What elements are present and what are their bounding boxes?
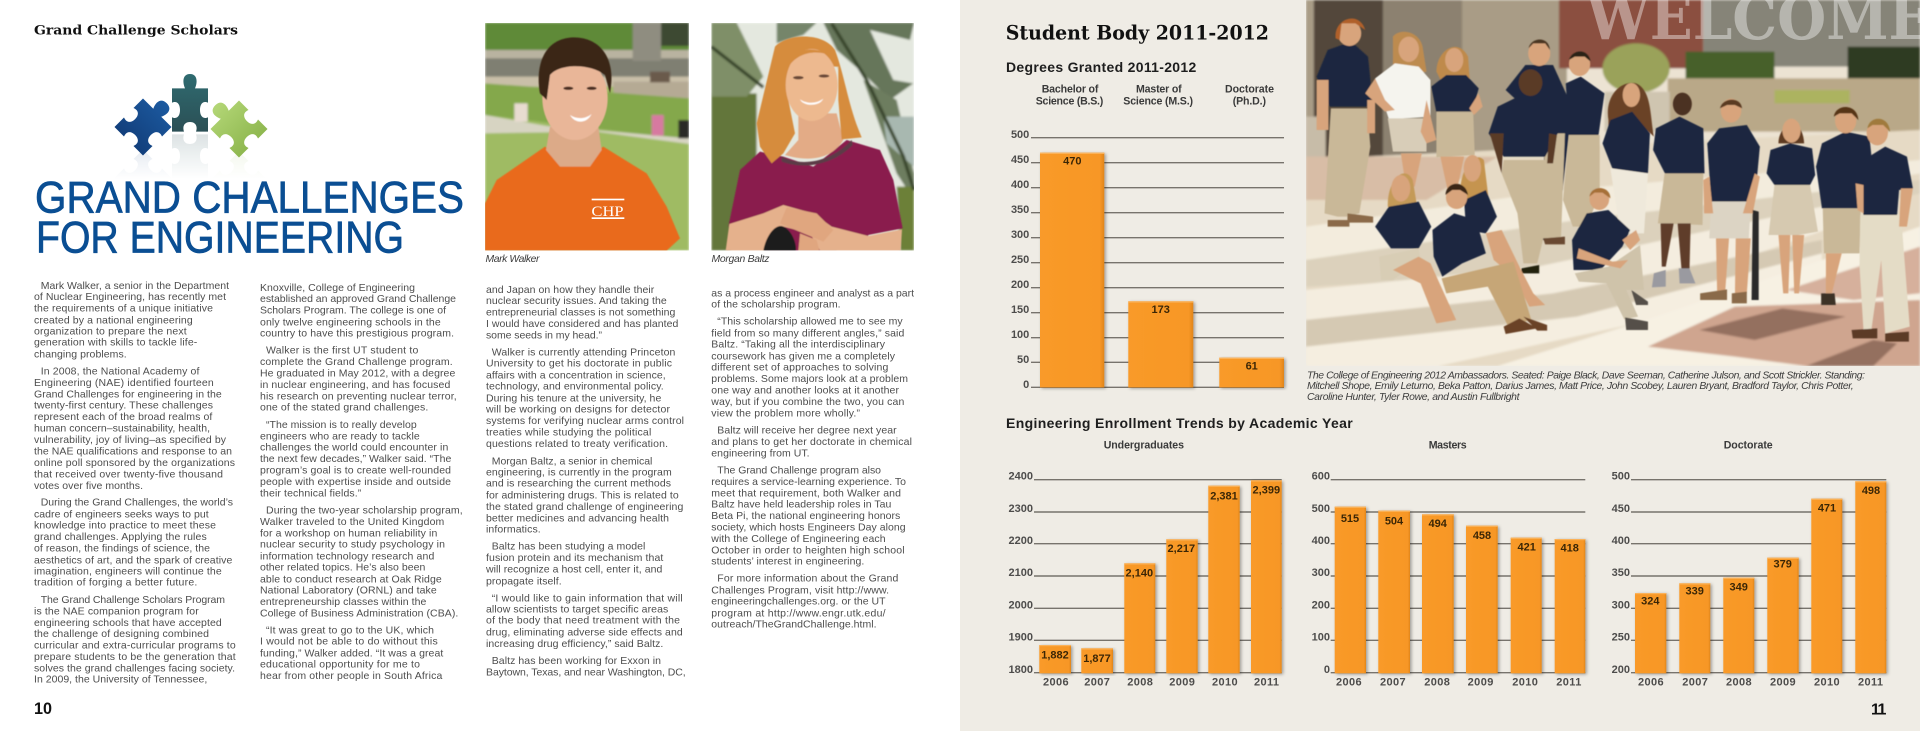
- body text column 1: twenty-first century. These challenges: [34, 399, 213, 411]
- body text column 1: is the NAE companion program for: [34, 605, 199, 617]
- body text column 1: the NAE qualifications and response to an: [34, 445, 232, 457]
- body text column 4: as a process engineer and analyst as a part: [711, 288, 914, 300]
- column labels: Science (B.S.): [1036, 96, 1103, 108]
- y axis labels: 300: [1011, 229, 1029, 241]
- body text column 4: The Grand Challenge program also: [717, 464, 881, 476]
- body text column 4: coursework has given me a completely: [711, 350, 896, 362]
- year labels: [1336, 676, 1582, 688]
- body text column 1: organization to prepare the next: [34, 326, 187, 338]
- caption: Mark Walker: Mark Walker: [486, 254, 540, 265]
- y axis labels: 300: [1312, 567, 1330, 579]
- body text column 4: with the College of Engineering each: [710, 533, 886, 545]
- column labels: Master of: [1136, 84, 1182, 96]
- body text column 3: [485, 284, 686, 678]
- body text column 2: “It was great to go to the UK, which: [266, 624, 434, 636]
- photo: College of Engineering Ambassadors on steps: [1306, 0, 1920, 366]
- bar values: 339: [1686, 586, 1704, 598]
- body text column 4: and plans to get her doctorate in chemical: [711, 436, 912, 448]
- body text column 1: Engineering (NAE) identified fourteen: [34, 377, 214, 389]
- body text column 1: votes over five months.: [34, 480, 143, 492]
- bar values: 1,877: [1083, 653, 1111, 665]
- body text column 3: of the body that need treatment with the: [486, 615, 680, 627]
- body text column 4: of the scholarship program.: [711, 299, 841, 311]
- body text column 2: people with expertise inside and outside: [260, 476, 451, 488]
- body text column 3: increasing drug efficiency,” said Baltz.: [486, 638, 663, 650]
- bar values: 173: [1152, 304, 1170, 316]
- photo: Mark Walker: CHP: [592, 204, 624, 220]
- bar values: 458: [1473, 530, 1491, 542]
- body text column 1: tradition of forging a better future.: [34, 577, 197, 589]
- bar values: 349: [1730, 581, 1748, 593]
- body text column 3: and Japan on how they handle their: [486, 284, 655, 296]
- y axis labels: 2100: [1009, 567, 1033, 579]
- chart title: Undergraduates: [1104, 439, 1184, 451]
- photo caption: Ambassadors: Mitchell Shope, Emily Leturno, Beka Patton, Darius James, Matt Price, John Scobey, Lauren Bryant, Bradford Taylor, Chris Potter,: [1307, 381, 1854, 392]
- title: Student Body 2011-2012: Student Body 2011-2012: [1006, 21, 1269, 44]
- body text column 1: imagination, engineers will continue the: [34, 565, 222, 577]
- body text column 4: view the problem more wholly.”: [711, 407, 860, 419]
- title: Grand Challenges for Engineering: FOR ENGINEERING: [36, 213, 404, 262]
- body text column 1: vulnerability, joy of living–as specified by: [34, 434, 227, 446]
- body text column 2: Walker is the first UT student to: [266, 345, 418, 357]
- y axis labels: 300: [1612, 600, 1630, 612]
- body text column 2: only twelve engineering schools in the: [260, 316, 441, 328]
- year labels: [1638, 676, 1883, 688]
- y axis labels: 250: [1011, 254, 1029, 266]
- bar values: 471: [1818, 503, 1836, 515]
- y axis labels: 400: [1612, 535, 1630, 547]
- year labels: 2006: [1638, 676, 1664, 688]
- year labels: 2010: [1814, 676, 1840, 688]
- y axis labels: 50: [1017, 354, 1029, 366]
- body text column 1: solves the grand challenges facing society.: [34, 663, 235, 675]
- chart: Degrees Granted 2011-2012: [1006, 59, 1284, 391]
- body text column 2: in nuclear engineering, and has focused: [260, 379, 450, 391]
- body text column 2: He graduated in May 2012, with a degree: [260, 367, 455, 379]
- body text column 4: different set of approaches to solving: [711, 361, 888, 373]
- body text column 1: of Nuclear Engineering, has recently met: [34, 291, 226, 303]
- body text column 2: for a workshop on human reliability in: [260, 527, 437, 539]
- body text column 3: entrepreneurial classes is not something: [486, 307, 675, 319]
- photo: Morgan Baltz: [711, 23, 914, 251]
- y axis labels: 400: [1312, 535, 1330, 547]
- body text column 3: Baltz has been studying a model: [492, 541, 645, 553]
- bar values: 421: [1518, 542, 1536, 554]
- body text column 1: aesthetics of art, and the spark of creative: [34, 554, 232, 566]
- body text column 3: questions related to treaty verification.: [486, 438, 668, 450]
- body text column 1: curricular and extra-curricular programs to: [34, 639, 236, 651]
- body text column 3: propagate itself.: [486, 575, 562, 587]
- body text column 2: National Laboratory (ORNL) and take: [260, 584, 437, 596]
- y axis labels: 500: [1612, 470, 1630, 482]
- y axis labels: 1900: [1009, 632, 1033, 644]
- body text column 3: “I would like to gain information that will: [492, 592, 683, 604]
- year labels: 2006: [1336, 676, 1362, 688]
- body text column 1: human concern–sustainability, health,: [34, 422, 210, 434]
- bar values: [1041, 484, 1280, 665]
- body text column 2: information technology research and: [260, 550, 434, 562]
- body text column 2: During the two-year scholarship program,: [266, 504, 463, 516]
- body text column 3: I would have considered and has planted: [486, 318, 678, 330]
- bar values: 494: [1429, 518, 1448, 530]
- body text column 1: online poll sponsored by the organizations: [34, 457, 235, 469]
- body text column 3: will be working on designs for detector: [485, 403, 670, 415]
- body text column 2: complete the Grand Challenge program.: [260, 356, 453, 368]
- bar values: [1063, 156, 1258, 372]
- body text column 2: College of Business Administration (CBA).: [260, 607, 458, 619]
- body text column 1: cadre of engineers seeks ways to put: [34, 508, 209, 520]
- year labels: 2008: [1726, 676, 1752, 688]
- bars: [1335, 507, 1585, 673]
- body text column 2: one of the stated grand challenges.: [260, 402, 428, 414]
- caption: Morgan Baltz: Morgan Baltz: [712, 254, 770, 265]
- bar values: 2,381: [1210, 491, 1238, 503]
- body text column 2: Knoxville, College of Engineering: [260, 282, 415, 294]
- photo: Mark Walker: [485, 23, 689, 251]
- body text column 3: University to get his doctorate in public: [486, 358, 672, 370]
- body text column 2: hear from other people in South Africa: [260, 670, 442, 682]
- body text column 3: Baytown, Texas, and near Washington, DC,: [486, 666, 686, 678]
- y axis labels: [1011, 129, 1029, 391]
- body text column 2: “The mission is to really develop: [266, 419, 417, 431]
- y axis labels: 100: [1011, 329, 1029, 341]
- chart: Undergraduates: [1009, 439, 1282, 688]
- bar values: 418: [1561, 543, 1579, 555]
- bar values: 2,217: [1168, 543, 1195, 555]
- column labels: Bachelor of: [1042, 84, 1099, 96]
- year labels: 2011: [1254, 676, 1279, 688]
- year labels: 2008: [1424, 676, 1450, 688]
- bar values: 324: [1641, 595, 1660, 607]
- body text column 3: engineering, is currently in the program: [486, 467, 672, 479]
- y axis labels: 600: [1312, 470, 1330, 482]
- body text column 3: affairs with a concentration in science,: [486, 369, 666, 381]
- body text column 4: outreach/TheGrandChallenge.html.: [711, 618, 877, 630]
- body text column 4: field from so many different angles,” said: [711, 327, 904, 339]
- people are painted back to front: [1506, 65, 1572, 240]
- body text column 1: the challenge of designing combined: [34, 628, 209, 640]
- y axis labels: 500: [1312, 503, 1330, 515]
- body text column 2: their technical fields.”: [260, 487, 362, 499]
- body text column 3: systems for verifying nuclear arms control: [486, 415, 684, 427]
- body text column 3: treaties while studying the political: [486, 427, 651, 439]
- y axis labels: 200: [1011, 279, 1029, 291]
- body text column 4: For more information about the Grand: [717, 573, 898, 585]
- body text column 4: program at http://www.engr.utk.edu/: [711, 607, 886, 619]
- body text column 1: [34, 280, 236, 686]
- bar values: 470: [1063, 156, 1081, 168]
- body text column 3: technology, and environmental policy.: [486, 381, 664, 393]
- body text column 2: educational opportunity for me to: [260, 659, 420, 671]
- y axis labels: 0: [1324, 664, 1330, 676]
- body text column 4: Beta Pi, the national engineering honors: [711, 510, 900, 522]
- body text column 2: other related topics. He’s also been: [260, 562, 425, 574]
- y axis labels: 1800: [1009, 664, 1033, 676]
- chart heading: Degrees Granted 2011-2012: [1006, 59, 1197, 75]
- bar values: 1,882: [1041, 650, 1069, 662]
- body text column 4: [710, 288, 914, 630]
- column labels: (Ph.D.): [1233, 96, 1266, 108]
- body text column 4: Baltz have held leadership roles in Tau: [711, 499, 891, 511]
- y axis labels: 0: [1023, 379, 1029, 391]
- year labels: 2007: [1084, 676, 1110, 688]
- bars: [1040, 153, 1284, 388]
- body text column 1: knowledge into practice to meet these: [34, 520, 216, 532]
- page number 10: 10: [34, 699, 52, 718]
- body text column 1: In 2009, the University of Tennessee,: [34, 674, 207, 686]
- section heading: Grand Challenge Scholars: Grand Challenge Scholars: [34, 24, 238, 39]
- body text column 4: requires a service-learning experience. To: [711, 476, 906, 488]
- body text column 3: the stated grand challenge of engineering: [486, 501, 683, 513]
- body text column 1: of reason, the findings of science, the: [34, 543, 210, 555]
- year labels: 2010: [1512, 676, 1538, 688]
- bar values: 515: [1341, 513, 1359, 525]
- y axis labels: 2200: [1009, 535, 1033, 547]
- body text column 2: able to conduct research at Oak Ridge: [260, 573, 442, 585]
- body text column 1: created by a national engineering: [34, 314, 193, 326]
- body text column 2: funding,” Walker added. “It was a great: [260, 647, 443, 659]
- body text column 2: country to have this prestigious program.: [260, 328, 454, 340]
- body text column 1: that received over twenty-five thousand: [34, 468, 223, 480]
- year labels: 2007: [1380, 676, 1406, 688]
- body text column 3: informatics.: [486, 524, 541, 536]
- body text column 4: way, but if you combine the two, you can: [710, 396, 904, 408]
- bar values: 61: [1246, 360, 1258, 372]
- body text column 3: better medicines and advancing health: [486, 512, 669, 524]
- icon: puzzle pieces logo: [100, 74, 290, 219]
- y axis labels: 150: [1011, 304, 1029, 316]
- body text column 4: students’ interest in engineering.: [711, 556, 864, 568]
- bar values: 2,140: [1126, 567, 1153, 579]
- body text column 4: one way and another looks at it another: [711, 384, 900, 396]
- year labels: 2008: [1127, 676, 1153, 688]
- body text column 2: program’s goal is to create well-rounded: [260, 465, 451, 477]
- body text column 1: In 2008, the National Academy of: [41, 365, 199, 377]
- body text column 2: established an approved Grand Challenge: [260, 293, 456, 305]
- y axis labels: 400: [1011, 179, 1029, 191]
- year labels: 2010: [1212, 676, 1238, 688]
- body text column 3: During his tenure at the university, he: [486, 392, 661, 404]
- body text column 2: engineers who are ready to tackle: [260, 430, 420, 442]
- body text column 2: nuclear security to study psychology in: [260, 539, 445, 551]
- title: Grand Challenges for Engineering: GRAND CHALLENGES: [35, 173, 464, 222]
- year labels: 2009: [1169, 676, 1195, 688]
- body text column 4: problems. Some majors look at a problem: [711, 373, 908, 385]
- body text column 2: Scholars Program. The college is one of: [260, 305, 446, 317]
- bar values: 504: [1385, 516, 1404, 528]
- y axis labels: 350: [1011, 204, 1029, 216]
- y axis labels: 100: [1312, 632, 1330, 644]
- body text column 1: Grand Challenges for engineering in the: [34, 388, 222, 400]
- body text column 3: Baltz has been working for Exxon in: [492, 655, 661, 667]
- body text column 4: “This scholarship allowed me to see my: [717, 316, 903, 328]
- body text column 4: Baltz will receive her degree next year: [717, 425, 897, 437]
- year labels: 2009: [1468, 676, 1494, 688]
- year labels: 2011: [1858, 676, 1883, 688]
- body text column 1: engineering schools that have accepted: [34, 617, 222, 629]
- left page background: [0, 0, 960, 731]
- y axis labels: 450: [1612, 503, 1630, 515]
- y axis labels: 500: [1011, 129, 1029, 141]
- chart: Doctorate: [1612, 439, 1886, 688]
- bars: [1039, 480, 1282, 673]
- photo caption: Ambassadors: Caroline Hunter, Tyler Rowe, and Austin Fullbright: [1307, 392, 1521, 403]
- body text column 3: and is researching the current methods: [486, 478, 671, 490]
- y axis labels: [1312, 470, 1330, 676]
- body text column 2: I would not be able to do without this: [260, 636, 438, 648]
- column labels: [1036, 84, 1274, 108]
- year labels: 2011: [1556, 676, 1582, 688]
- chart: Masters: [1312, 439, 1585, 688]
- chart title: Doctorate: [1724, 439, 1773, 451]
- y axis labels: 350: [1612, 567, 1630, 579]
- body text column 3: Walker is currently attending Princeton: [492, 347, 676, 359]
- y axis labels: 2300: [1009, 503, 1033, 515]
- chart title: Masters: [1429, 439, 1467, 451]
- body text column 4: meet that requirement, both Walker and: [711, 487, 901, 499]
- y axis labels: 250: [1612, 632, 1630, 644]
- body text column 1: prepare students to be the generation that: [34, 651, 236, 663]
- body text column 1: During the Grand Challenges, the world’s: [41, 497, 233, 509]
- body text column 3: nuclear security issues. And taking the: [486, 295, 667, 307]
- body text column 3: will recognize a host cell, enter it, and: [485, 564, 662, 576]
- year labels: 2006: [1043, 676, 1069, 688]
- body text column 1: the requirements of a unique initiative: [34, 303, 213, 315]
- body text column 1: changing problems.: [34, 348, 127, 360]
- right page background: [960, 0, 1920, 731]
- bar values: [1341, 513, 1579, 555]
- year labels: [1043, 676, 1279, 688]
- body text column 3: some seeds in my head.”: [486, 329, 602, 341]
- body text column 1: Mark Walker, a senior in the Department: [41, 280, 229, 292]
- column labels: Doctorate: [1225, 84, 1274, 96]
- body text column 4: Baltz. “Taking all the interdisciplinary: [711, 339, 886, 351]
- column labels: Science (M.S.): [1123, 96, 1193, 108]
- title: Grand Challenges for Engineering: [35, 173, 464, 262]
- body text column 2: entrepreneurship classes within the: [260, 596, 426, 608]
- body text column 4: engineeringchallenges.org. or the UT: [711, 596, 886, 608]
- bar values: 379: [1774, 559, 1792, 571]
- y axis labels: 2400: [1009, 470, 1033, 482]
- y axis labels: [1009, 470, 1033, 676]
- body text column 2: [260, 282, 463, 682]
- bar values: [1641, 485, 1880, 607]
- body text column 1: The Grand Challenge Scholars Program: [41, 594, 225, 606]
- body text column 4: Challenges Program, visit http://www.: [711, 584, 889, 596]
- year labels: 2007: [1682, 676, 1708, 688]
- photo caption: Ambassadors: [1307, 370, 1865, 403]
- body text column 3: for administering drugs. This is related to: [486, 489, 679, 501]
- body text column 4: October in order to heighten high school: [711, 544, 905, 556]
- body text column 2: the next few decades,” Walker said. “The: [260, 453, 451, 465]
- body text column 3: drug, eliminating adverse side effects and: [486, 626, 683, 638]
- bar values: 498: [1862, 485, 1880, 497]
- bar values: 2,399: [1253, 484, 1280, 496]
- heading: Engineering Enrollment Trends: Engineering Enrollment Trends by Academic Year: [1006, 415, 1353, 431]
- y axis labels: 200: [1612, 664, 1630, 676]
- y axis labels: 2000: [1009, 600, 1033, 612]
- y axis labels: [1612, 470, 1630, 676]
- body text column 3: Morgan Baltz, a senior in chemical: [492, 455, 652, 467]
- body text column 1: grand challenges. Applying the rules: [34, 531, 207, 543]
- page number 11: 11: [1871, 701, 1887, 718]
- photo caption: Ambassadors: The College of Engineering 2012 Ambassadors. Seated: Paige Black, Dave Seeman, Catherine Julson, and Scott Strickler. Standing:: [1307, 370, 1865, 382]
- body text column 1: represent each of the broad realms of: [34, 411, 212, 423]
- y axis labels: 200: [1312, 600, 1330, 612]
- body text column 2: Walker traveled to the United Kingdom: [260, 516, 445, 528]
- bars: [1635, 481, 1886, 673]
- year labels: 2009: [1770, 676, 1796, 688]
- body text column 3: allow scientists to target specific areas: [486, 604, 668, 616]
- body text column 4: engineering from UT.: [711, 447, 810, 459]
- y axis labels: 450: [1011, 154, 1029, 166]
- body text column 2: challenges the world could encounter in: [260, 442, 448, 454]
- body text column 1: generation with skills to tackle life-: [34, 337, 198, 349]
- body text column 2: his research on preventing nuclear terror,: [260, 390, 457, 402]
- body text column 4: society, which hosts Engineers Day along: [711, 522, 906, 534]
- body text column 3: fusion protein and its mechanism that: [486, 552, 663, 564]
